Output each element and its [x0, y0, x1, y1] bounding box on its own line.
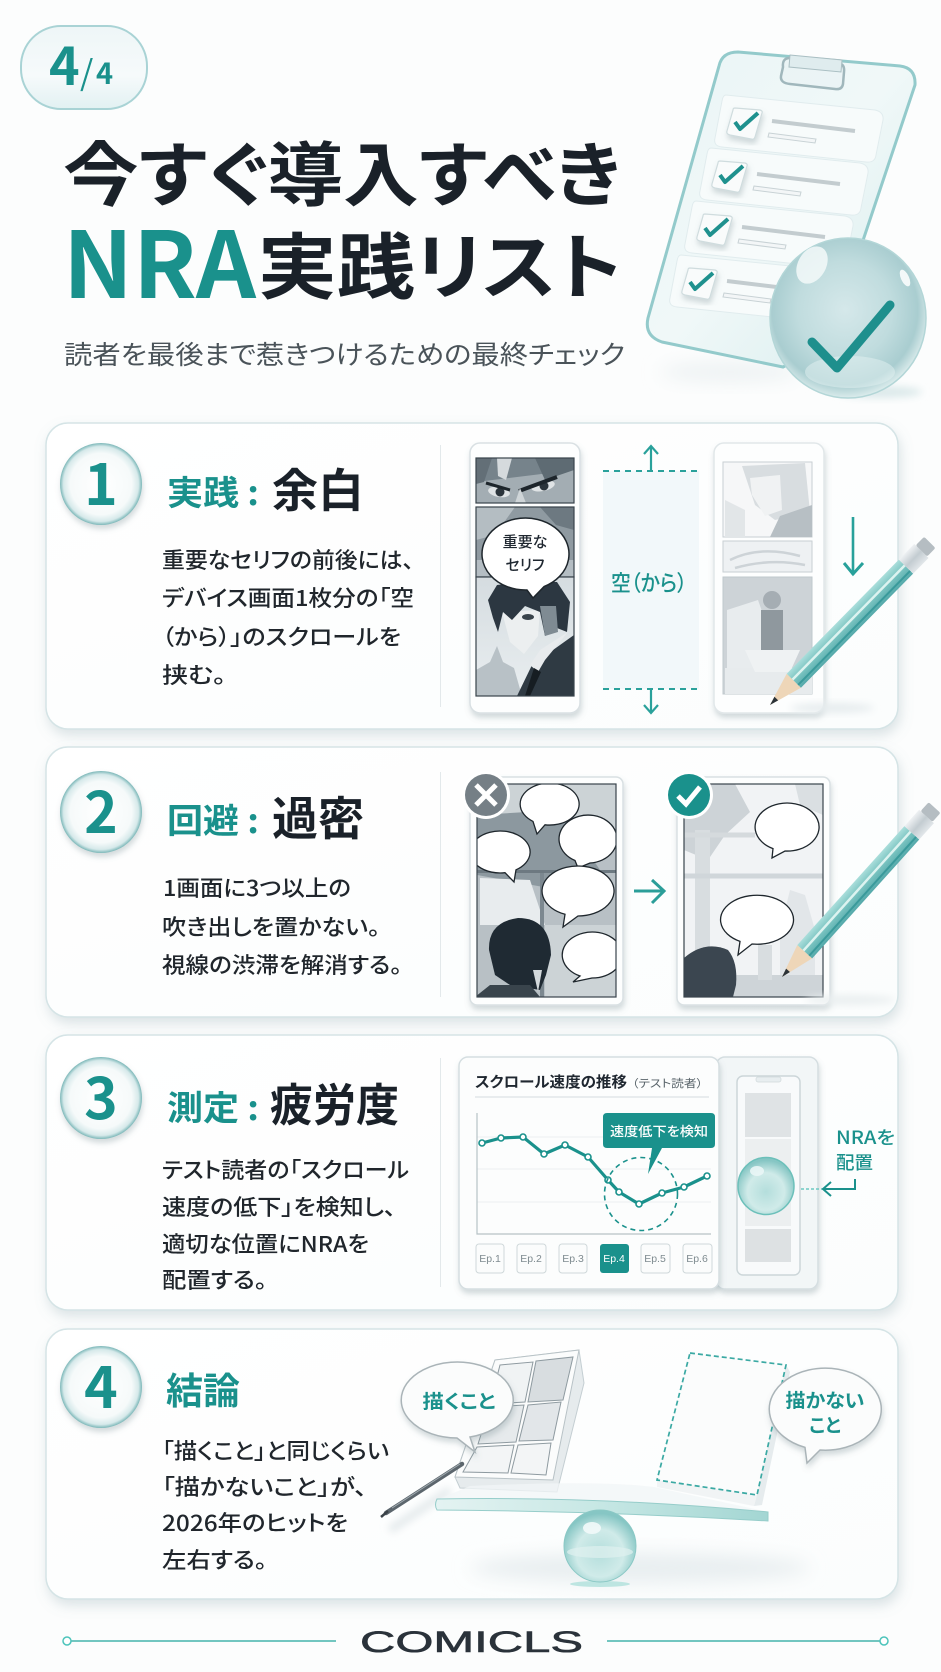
- body text 1: 重要なセリフの前後には、: [162, 543, 414, 575]
- title: 実践リスト: [258, 209, 622, 314]
- body text 4: 「描くこと」と同じくらい: [162, 1434, 389, 1466]
- episode tabs: Ep.3: [562, 1253, 584, 1265]
- icon: check badge: [665, 771, 713, 819]
- body text 2: [162, 871, 402, 980]
- phone: reduced bubbles: [665, 771, 830, 1005]
- empty scroll area: [603, 446, 699, 713]
- speech bubble: not drawing: 描かない: [786, 1386, 864, 1413]
- heading 3: 疲労度: [270, 1069, 399, 1134]
- arrow: before to after: [634, 880, 664, 903]
- body text 3: 適切な位置にNRAを: [162, 1227, 369, 1259]
- callout: place NRA here: 配置: [836, 1149, 873, 1175]
- icon: glass sphere: [738, 1158, 794, 1214]
- episode tabs: Ep.1: [479, 1253, 501, 1265]
- badge: page number 4/4: 4: [96, 51, 113, 93]
- glass sphere: [564, 1510, 636, 1587]
- number badge 1: [60, 440, 142, 525]
- chart: scroll speed: スクロール速度の推移: [475, 1071, 627, 1092]
- episode tabs: Ep.4: [603, 1253, 625, 1265]
- heading 3: 測定 :: [167, 1081, 259, 1130]
- body text 2: 吹き出しを置かない。: [162, 910, 380, 942]
- glass plank: [436, 1483, 768, 1521]
- badge: page number 4/4: 4: [49, 25, 80, 100]
- icon: glass clipboard with checklist and check sphere: [647, 52, 926, 398]
- footer: logo with lines: [63, 1626, 888, 1659]
- phone: faded manga: [714, 443, 824, 713]
- body text 4: 左右する。: [162, 1543, 267, 1575]
- subtitle: 読者を最後まで惹きつけるための最終チェック: [64, 335, 625, 372]
- heading 1: 実践 :: [167, 466, 259, 515]
- speech bubble: drawing: 描くこと: [422, 1387, 496, 1414]
- heading 3: [167, 1069, 399, 1134]
- body text 2: 1画面に3つ以上の: [163, 871, 351, 903]
- body text 3: [162, 1153, 409, 1295]
- body text 1: デバイス画面1枚分の「空: [162, 581, 414, 613]
- title: [63, 120, 622, 325]
- callout: place NRA here: [801, 1124, 895, 1196]
- speech bubble: not drawing: こと: [809, 1411, 841, 1438]
- speech bubble: [482, 518, 569, 598]
- heading 4: 結論: [166, 1361, 240, 1415]
- episode tabs: Ep.6: [686, 1253, 708, 1265]
- badge: page number 4/4: /: [80, 46, 93, 95]
- body text 1: [162, 543, 414, 690]
- speech bubble: not drawing: [769, 1368, 881, 1463]
- chart: scroll speed: （テスト読者）: [632, 1075, 703, 1091]
- speech bubble: 重要な: [503, 531, 548, 552]
- body text 4: 2026年のヒットを: [162, 1506, 348, 1538]
- body text 3: テスト読者の「スクロール: [162, 1153, 409, 1185]
- number badge 4: [60, 1343, 142, 1428]
- callout: place NRA here: NRAを: [836, 1124, 895, 1150]
- body text 1: 挟む。: [162, 658, 226, 690]
- title: NRA: [63, 192, 257, 325]
- phone panel with NRA sphere: [716, 1057, 818, 1289]
- callout: speed drop detected: 速度低下を検知: [610, 1121, 708, 1140]
- icon: pencil: [763, 535, 937, 713]
- data line: [479, 1134, 710, 1207]
- body text 1: （から）」のスクロールを: [162, 620, 401, 652]
- icon: pencil: [775, 801, 941, 1005]
- manga book: [455, 1350, 584, 1492]
- body text 3: 速度の低下」を検知し、: [162, 1190, 396, 1222]
- icon: glass sphere with check: [770, 238, 926, 398]
- phone: too many bubbles: [462, 771, 623, 1005]
- number badge 2: 2: [84, 768, 118, 850]
- number badge 1: 1: [84, 440, 118, 522]
- heading 1: 余白: [272, 455, 364, 521]
- episode tabs: Ep.2: [520, 1253, 542, 1265]
- panel: 3 fatigue measurement: [46, 1035, 898, 1310]
- heading 2: 過密: [272, 783, 364, 849]
- empty scroll area: 空（から）: [611, 566, 687, 598]
- speech bubble: セリフ: [505, 554, 545, 575]
- footer: logo with lines: COMICLS: [360, 1626, 583, 1659]
- body text 2: 視線の渋滞を解消する。: [162, 948, 402, 980]
- speech bubbles: crowded: [470, 783, 622, 982]
- callout: speed drop detected: [603, 1113, 715, 1174]
- speech bubbles: reduced: [721, 803, 819, 955]
- number badge 3: 3: [84, 1054, 118, 1136]
- icon: x badge: [462, 771, 510, 819]
- number badge 2: [60, 768, 142, 853]
- speech bubble: drawing: [401, 1362, 513, 1452]
- illustration: balance scale: [381, 1350, 881, 1587]
- panel: 4 conclusion: [46, 1329, 898, 1599]
- body text 4: [162, 1434, 389, 1575]
- badge: page number 4/4: [21, 25, 147, 109]
- episode tabs: [476, 1244, 712, 1273]
- heading 1: [167, 455, 364, 521]
- title: 今すぐ導入すべき: [63, 120, 621, 221]
- episode tabs: Ep.5: [644, 1253, 666, 1265]
- panel: 2 overcrowding: [46, 747, 941, 1017]
- number badge 4: 4: [84, 1343, 118, 1425]
- arrow: scroll down: [844, 517, 863, 575]
- heading 2: 回避 :: [167, 794, 259, 843]
- pen: [381, 1464, 462, 1530]
- heading 2: [167, 783, 364, 849]
- body text 4: 「描かないこと」が、: [162, 1470, 367, 1502]
- blank page stack: [657, 1353, 790, 1506]
- phone: dense manga with important line: [470, 443, 580, 713]
- body text 3: 配置する。: [162, 1263, 267, 1295]
- chart: scroll speed: [459, 1057, 719, 1289]
- number badge 3: [60, 1054, 142, 1139]
- panel: 1 margin: [46, 423, 937, 729]
